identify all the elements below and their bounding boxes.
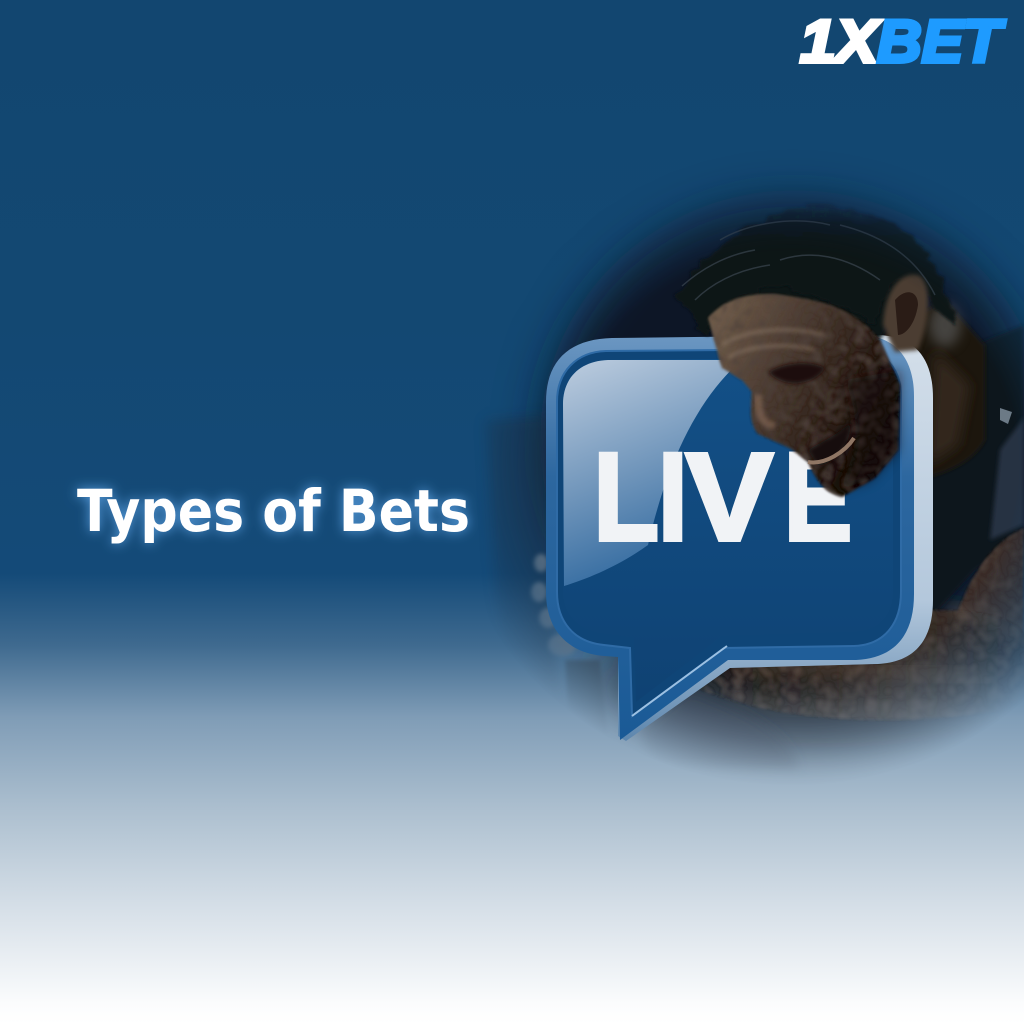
- forearm: [700, 610, 1024, 720]
- upper arm: [958, 528, 1024, 637]
- bubble rim: [546, 335, 914, 740]
- bubble inner outline: [557, 349, 901, 716]
- logo: 1XBET: [800, 8, 1005, 75]
- hair base: [708, 281, 898, 342]
- bubble side (3D depth): [618, 335, 933, 741]
- fingers at left: [531, 554, 576, 656]
- logo part: 1X: 1X: [800, 8, 882, 75]
- nose highlight: [758, 395, 775, 425]
- photo: athlete body behind bubble: [485, 190, 1024, 770]
- shirt: [932, 324, 1024, 610]
- neck: [883, 306, 986, 477]
- hair edge: [677, 206, 958, 336]
- shirt tag: [1000, 408, 1012, 424]
- mouth: [808, 422, 850, 466]
- forehead wrinkles: [722, 330, 825, 358]
- LIVE wordmark: LI: [593, 426, 688, 567]
- LIVE wordmark: [593, 426, 852, 567]
- logo part: BET: BET: [877, 8, 1005, 75]
- face: [708, 294, 900, 497]
- lower shadow body: [644, 724, 795, 768]
- face shadow on cheek: [838, 370, 900, 490]
- nape stubble: [929, 303, 961, 347]
- ear: [883, 275, 928, 352]
- photo: athlete head in front of bubble: [677, 206, 958, 497]
- LIVE wordmark: V: [686, 428, 773, 567]
- dark photo backdrop: [540, 190, 1024, 690]
- tyre at left: [486, 416, 557, 676]
- dark lower backdrop: [584, 653, 1000, 774]
- title: Types of Bets: [77, 477, 470, 545]
- bubble front panel: [563, 358, 893, 702]
- gloss highlight: [563, 360, 742, 586]
- tail highlight: [632, 646, 727, 716]
- eye shadow: [768, 363, 825, 383]
- speech bubble: LIVE: [546, 335, 933, 741]
- sleeve: [990, 415, 1024, 540]
- hair strands: [682, 221, 935, 300]
- LIVE wordmark: E: [784, 428, 852, 567]
